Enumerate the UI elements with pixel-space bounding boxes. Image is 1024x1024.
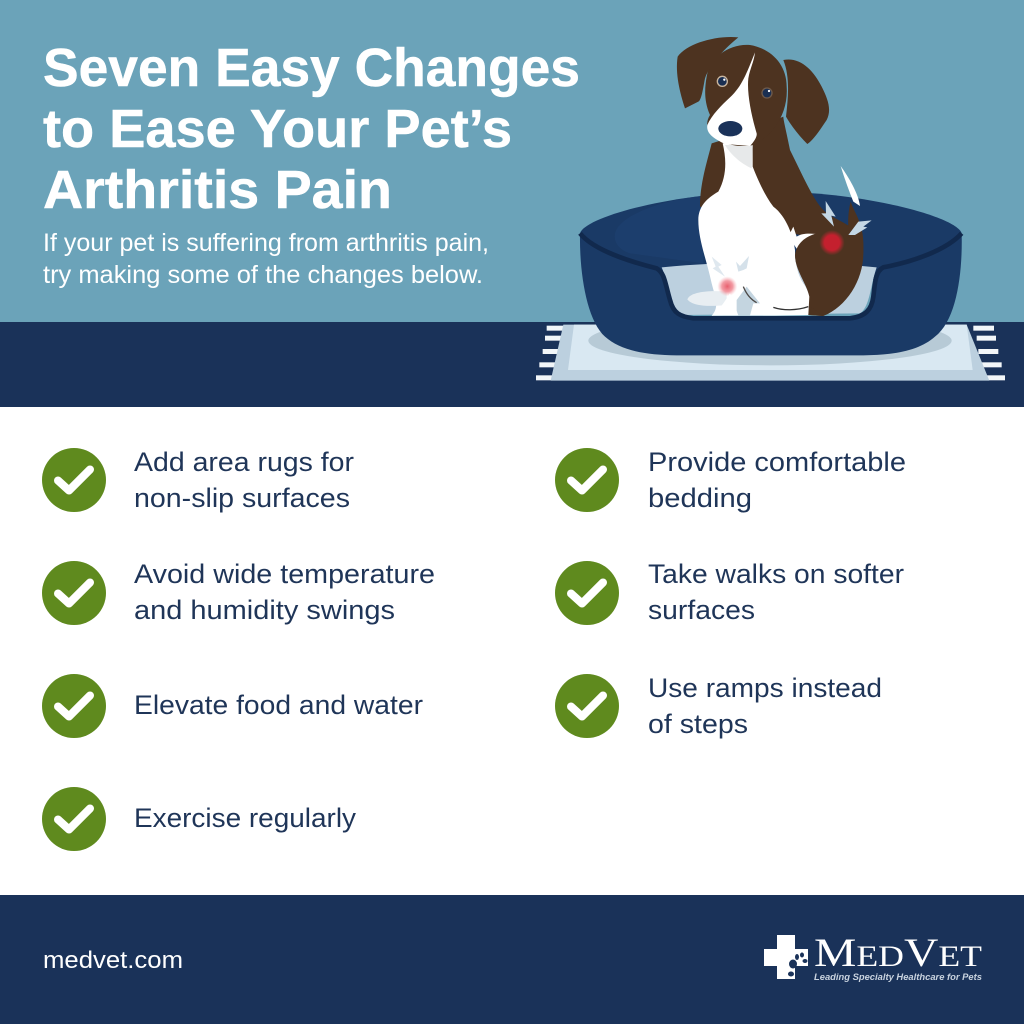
item: walks: surfaces <box>648 595 755 625</box>
item: bedding <box>555 447 906 513</box>
illustration: dog on bed <box>536 37 1005 381</box>
subtitle: If your pet is suffering from arthritis pain, <box>43 229 489 257</box>
floor band <box>0 322 1024 407</box>
title: Seven Easy Changes <box>43 38 580 98</box>
item: walks <box>555 559 904 625</box>
dog haunch <box>795 218 863 316</box>
item: bedding: bedding <box>648 483 752 513</box>
dog head <box>705 45 787 146</box>
header background panel <box>0 0 1024 322</box>
dog paws over rim <box>712 293 775 316</box>
item: ramps: of steps <box>648 709 748 739</box>
item: exercise: Exercise regularly <box>134 803 357 833</box>
title: Arthritis Pain <box>43 160 392 220</box>
dog left ear <box>677 37 738 108</box>
dog nose <box>718 121 742 136</box>
footer band <box>0 895 1024 1024</box>
tagline: Leading Specialty Healthcare for Pets <box>814 972 982 983</box>
icon: bed front wall <box>580 233 962 355</box>
subtitle: try making some of the changes below. <box>43 261 483 289</box>
wordmark: MEDVET <box>814 930 982 975</box>
item: temperature: and humidity swings <box>134 595 395 625</box>
item: area rugs <box>42 447 354 513</box>
title <box>43 38 580 220</box>
pain markers <box>819 230 845 255</box>
item: ramps <box>555 673 882 739</box>
checklist panel background <box>0 407 1024 895</box>
dog eyes <box>717 76 728 87</box>
item: walks: Take walks on softer <box>648 559 904 589</box>
dog right ear <box>783 59 829 144</box>
icon: rug <box>536 316 1005 381</box>
item: area rugs: Add area rugs for <box>134 447 354 477</box>
icon: cross with paw <box>764 935 808 979</box>
item: area rugs: non-slip surfaces <box>134 483 350 513</box>
item: temperature <box>42 559 435 625</box>
item: elevate food: Elevate food and water <box>134 690 423 720</box>
item: elevate food <box>42 674 423 738</box>
item: exercise <box>42 787 357 851</box>
dog white chest and legs <box>698 140 812 316</box>
item: ramps: Use ramps instead <box>648 673 882 703</box>
icon: bed cushion <box>662 262 877 315</box>
title: to Ease Your Pet’s <box>43 99 512 159</box>
dog back and chest fur <box>700 117 850 237</box>
bed rim shadow <box>580 233 962 318</box>
item: temperature: Avoid wide temperature <box>134 559 435 589</box>
dog tail <box>848 202 864 253</box>
dog front paw <box>687 291 727 306</box>
icon: dog <box>677 37 872 316</box>
footer url: medvet.com <box>43 947 183 974</box>
checklist left column <box>42 447 435 851</box>
item: bedding: Provide comfortable <box>648 447 906 477</box>
logo: MedVet <box>764 930 982 983</box>
icon: dog bed back <box>580 192 962 280</box>
subtitle <box>43 229 489 289</box>
checklist right column <box>555 447 906 739</box>
